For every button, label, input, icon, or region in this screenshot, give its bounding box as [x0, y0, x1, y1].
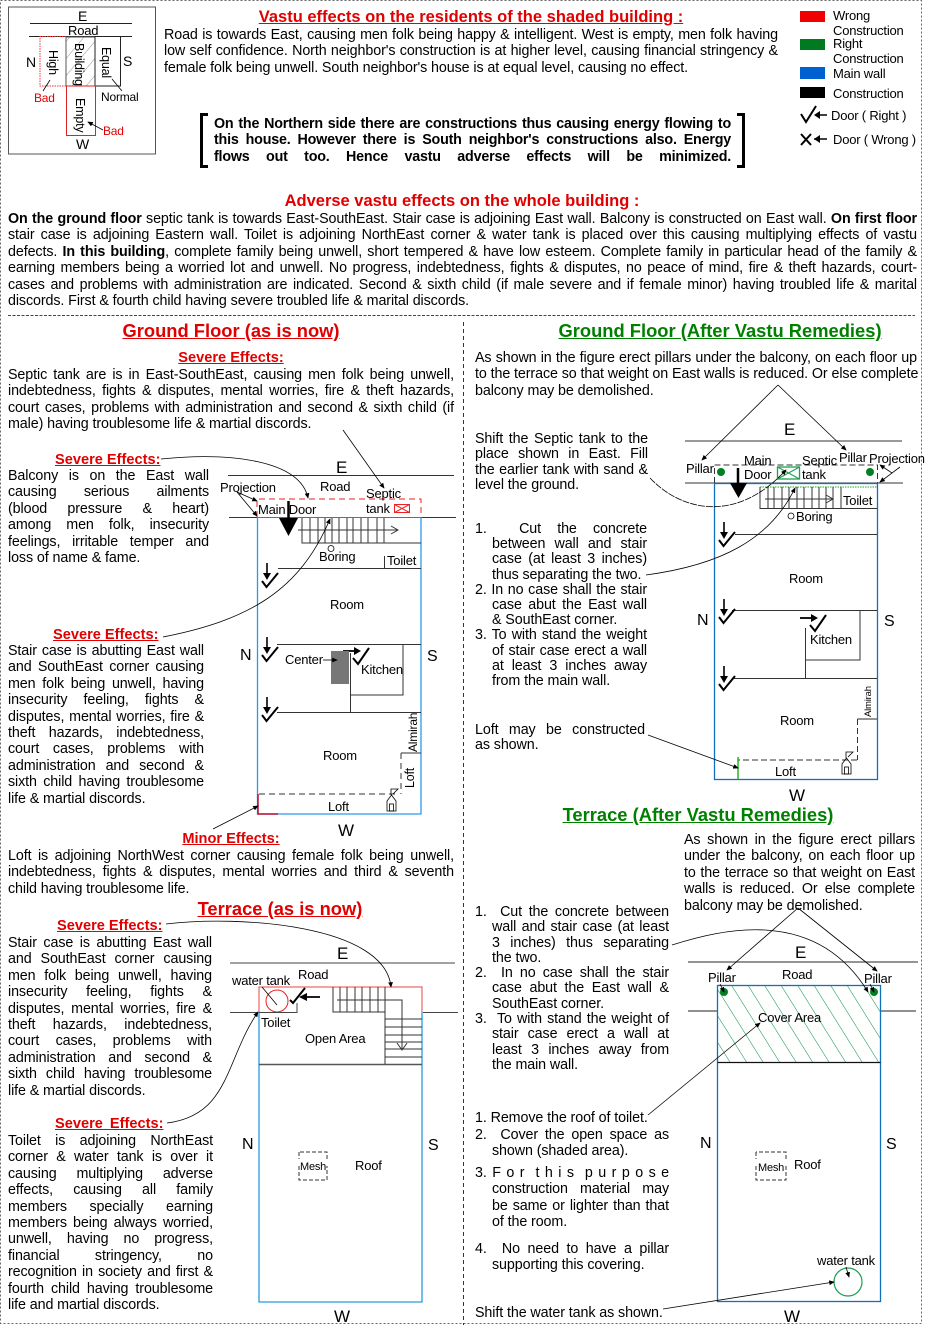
diagram: plot sketch: Bad	[34, 91, 55, 105]
plan: terrace after remedies: N	[700, 1135, 711, 1152]
text: septic tank effects: indebtedness, fights & disputes, mental worries, fire & theft hazards,	[8, 383, 454, 399]
diagram: plot sketch: Bad	[103, 124, 124, 138]
text: balcony effects: among men folk, insecurity	[8, 517, 209, 533]
text: whole building: On the ground floor septic tank is towards East-SouthEast. Stair case is adjoining East wall. Balcony is constructed on East wall. On first floor	[8, 211, 917, 227]
text: balcony effects	[8, 468, 210, 566]
text: ground floor remedies list: between wall and stair	[492, 536, 647, 552]
plan: ground floor as is: Boring	[319, 549, 355, 564]
text: balcony effects: loss of name & fame.	[8, 550, 140, 566]
text: shift septic tank	[475, 431, 648, 493]
diagram: plot sketch: Road	[68, 23, 98, 38]
text: construction material: 3. F o r t h i s p u r p o s e	[475, 1165, 669, 1181]
bracketed note: flows out too. Hence vastu adverse effects will be minimized.	[214, 149, 731, 165]
plan: ground floor as is: N	[240, 647, 251, 664]
text: shift septic tank: Shift the Septic tank to the	[475, 431, 648, 447]
text: shift septic tank: place shown in East. Fill	[475, 446, 648, 462]
text: shift septic tank: the earlier tank with sand &	[475, 462, 648, 478]
plan: ground floor after remedies: Toilet	[843, 493, 873, 508]
text: stair case effects: insecurity feeling, fights &	[8, 692, 204, 708]
text: loft effects	[8, 848, 454, 897]
text: terrace stair effects: insecurity feeling, fights &	[8, 984, 212, 1000]
text: toilet effects: fourth child having troublesome	[8, 1281, 213, 1297]
text: ground floor remedies list: of stair case erect a wall	[492, 643, 647, 659]
plan: ground floor after remedies: Room	[780, 713, 814, 728]
plan: ground floor as is: Loft	[328, 799, 349, 814]
text: toilet effects: life and martial discords.	[8, 1297, 160, 1313]
text: cover open space: shown (shaded area).	[492, 1143, 628, 1159]
plan: terrace after remedies: Cover Area	[758, 1010, 822, 1025]
plan: ground floor after remedies: Loft	[775, 764, 796, 779]
legend: Wrong	[833, 8, 870, 23]
plan: terrace as is: Roof	[355, 1158, 382, 1173]
text: toilet effects: causing multiplying adverse	[8, 1166, 213, 1182]
text: cover open space: 2. Cover the open space as	[475, 1127, 669, 1143]
text: terrace remedies list: the main wall.	[492, 1057, 578, 1073]
text: terrace remedies list: 2. In no case shall the stair	[475, 965, 669, 981]
text: stair case effects: administration and second &	[8, 758, 204, 774]
text: balcony effects: Balcony is on the East wall	[8, 468, 209, 484]
plan: ground floor after remedies: E	[784, 420, 795, 439]
text: no pillar: supporting this covering.	[492, 1257, 644, 1273]
diagram: plot sketch: Empty	[73, 98, 87, 133]
text: terrace remedies list: wall and stair case (at least	[492, 919, 669, 935]
arrows: terrace as is	[166, 921, 391, 1123]
text: terrace pillars advice: under the balcony, on each floor up	[684, 848, 915, 864]
text: toilet effects: members specially earning	[8, 1199, 213, 1215]
plan: terrace as is: S	[428, 1137, 438, 1154]
plan: terrace as is: Open Area	[305, 1031, 366, 1046]
text: terrace remedies list: 3. To with stand the weight of	[475, 1011, 669, 1027]
text: loft effects: Loft is adjoining NorthWest corner causing female folk being unwell,	[8, 848, 454, 864]
diagram: plot sketch: S	[123, 53, 132, 69]
text: residents effects	[164, 27, 778, 76]
text: terrace remedies list: case abut the East wall &	[492, 980, 669, 996]
text: terrace stair effects: life & martial discords.	[8, 1083, 145, 1099]
text: no pillar	[475, 1241, 669, 1273]
text: septic tank effects: court cases, problems with administration and second & sixth child (if	[8, 400, 454, 416]
text: ground floor remedies list: case (at least 3 inches)	[492, 551, 647, 567]
plan: ground floor after remedies: Boring	[796, 509, 832, 524]
plan: ground floor after remedies: Pillar	[686, 461, 715, 476]
plan: ground floor as is: Center	[285, 652, 324, 667]
plan: terrace after remedies: Pillar	[864, 971, 893, 986]
plan: terrace after remedies: Roof	[794, 1157, 821, 1172]
plan: ground floor after remedies: W	[789, 786, 805, 805]
plan: ground floor after remedies: Projection	[869, 451, 925, 466]
plan: ground floor as is: Road	[320, 479, 350, 494]
text: stair case effects: and SouthEast corner causing	[8, 659, 204, 675]
plan: terrace as is: N	[242, 1136, 253, 1153]
plan: ground floor after remedies: Septic	[802, 453, 838, 468]
text: septic tank effects	[8, 367, 454, 432]
plan: terrace as is: Toilet	[261, 1015, 291, 1030]
heading: severe effects 5: Severe Effects:	[55, 1116, 163, 1132]
text: cover open space	[475, 1127, 669, 1159]
heading: severe effects 3: Severe Effects:	[53, 627, 158, 643]
text: whole building: earning members being a worried lot and unwell. No progress, indebtedness, fights & disputes, no peace of mind, fire & theft hazards, court-	[8, 260, 917, 276]
text: ground floor remedies list: 3. To with stand the weight	[475, 627, 647, 643]
plan: terrace after remedies: Mesh	[758, 1162, 784, 1174]
plan: ground floor after remedies: Pillar	[839, 450, 868, 465]
text: toilet effects: financial stringency, no	[8, 1248, 213, 1264]
arrows: terrace after remedies	[648, 908, 877, 1309]
text: shift septic tank: level the ground.	[475, 477, 579, 493]
text: terrace stair effects: and SouthEast corner causing	[8, 951, 212, 967]
text: toilet effects: Toilet is adjoining NorthEast	[8, 1133, 213, 1149]
plan: terrace after remedies: S	[886, 1136, 896, 1153]
text: stair case effects: sixth child having troublesome	[8, 774, 204, 790]
text: loft effects: child having troublesome life.	[8, 881, 189, 897]
heading: terrace after remedies: Terrace (After Vastu Remedies)	[563, 804, 833, 825]
text: construction material: of the room.	[492, 1214, 567, 1230]
text: loft note: as shown.	[475, 737, 538, 753]
text: terrace stair effects: sixth child having troublesome	[8, 1066, 212, 1082]
plan: ground floor after remedies: Door	[744, 467, 772, 482]
plan: terrace as is: E	[337, 944, 348, 963]
legend: Right	[833, 36, 863, 51]
text: shift water tank: Shift the water tank as shown.	[475, 1305, 663, 1321]
plan: ground floor as is: Toilet	[387, 553, 417, 568]
plan: ground floor as is: Room	[330, 597, 364, 612]
text: remove roof: 1. Remove the roof of toilet.	[475, 1110, 648, 1126]
plan: ground floor after remedies	[685, 420, 925, 805]
text: toilet effects: corner & water tank is over it	[8, 1149, 213, 1165]
bracketed note: this house. However there is South neighbor's constructions also. Energy	[214, 132, 731, 148]
plan: ground floor after remedies: Room	[789, 571, 823, 586]
text: stair case effects: life & martial discords.	[8, 791, 145, 807]
text: pillars advice: balcony may be demolished.	[475, 383, 654, 399]
text: terrace stair effects: theft hazards, indebtedness,	[8, 1017, 212, 1033]
text: terrace pillars advice: balcony may be demolished.	[684, 898, 863, 914]
plan: ground floor after remedies: tank	[802, 467, 826, 482]
text: whole building	[8, 211, 917, 309]
text: pillars advice: As shown in the figure erect pillars under the balcony, on each floor up	[475, 350, 917, 366]
plan: terrace as is: water tank	[231, 973, 291, 988]
text: terrace remedies list: 1. Cut the concrete between	[475, 904, 669, 920]
text: ground floor remedies list: from the main wall.	[492, 673, 610, 689]
plan: ground floor as is: Almirah	[406, 713, 420, 752]
text: construction material	[475, 1165, 670, 1230]
plan: ground floor after remedies: Almirah	[863, 686, 874, 717]
text: terrace remedies list: least 3 inches away from	[492, 1042, 669, 1058]
diagram: plot sketch: N	[26, 54, 36, 70]
arrows: ground floor as is	[161, 430, 384, 829]
text: whole building: stair case is adjoining Eastern wall. Toilet is adjoining NorthEast corner & water tank is placed over this causing multiplying effects of vastu	[8, 227, 917, 243]
text: terrace pillars advice: to the terrace so that weight on East	[684, 865, 915, 881]
text: terrace stair effects	[8, 935, 212, 1099]
text: no pillar: 4. No need to have a pillar	[475, 1241, 669, 1257]
plan: terrace as is: Road	[298, 967, 328, 982]
text: toilet effects: members being always worried,	[8, 1215, 213, 1231]
text: stair case effects: theft hazards, indebtedness,	[8, 725, 204, 741]
text: ground floor remedies list: thus separating the two.	[492, 567, 641, 583]
text: ground floor remedies list: 2. In no case shall the stair	[475, 582, 647, 598]
legend: Door ( Wrong )	[833, 132, 916, 147]
diagram: plot sketch: Equal	[99, 47, 113, 78]
text: terrace stair effects: men folk being unwell, having	[8, 968, 212, 984]
text: whole building: defects. In this building, complete family being unwell, short tempered & have low esteem. Complete family in particular head of the family &	[8, 244, 917, 260]
text: terrace remedies list: stair case erect a wall at	[492, 1026, 669, 1042]
diagram: plot sketch: W	[76, 136, 90, 152]
plan: terrace after remedies	[688, 943, 918, 1325]
heading: ground floor after remedies: Ground Floor (After Vastu Remedies)	[558, 320, 882, 341]
text: terrace remedies list: 3 inches) thus separating	[492, 935, 669, 951]
plan: ground floor as is: Loft	[403, 767, 417, 788]
plan: ground floor as is: tank	[366, 501, 390, 516]
plan: ground floor as is: Main Door	[258, 502, 317, 517]
bracketed note: On the Northern side there are constructions thus causing energy flowing to	[214, 116, 731, 132]
diagram: plot sketch: Normal	[101, 90, 138, 104]
text: balcony effects: causing serious ailments	[8, 484, 209, 500]
plan: terrace after remedies: E	[795, 943, 806, 962]
plan: terrace after remedies: water tank	[816, 1253, 876, 1268]
plan: ground floor as is: Septic	[366, 486, 402, 501]
text: terrace remedies list: the two.	[492, 950, 541, 966]
text: residents effects: low self confidence. North neighbor's construction is at higher level, causing financial stringency &	[164, 43, 778, 59]
legend: Construction	[833, 51, 904, 66]
plan: ground floor as is: Kitchen	[361, 662, 403, 677]
diagram: plot sketch: Building	[72, 43, 86, 86]
legend: Door ( Right )	[831, 108, 906, 123]
text: ground floor remedies list: at least 3 inches away	[492, 658, 647, 674]
text: stair case effects: men folk being unwell, having	[8, 676, 204, 692]
plan: ground floor as is: S	[427, 648, 437, 665]
text: toilet effects: unwell, having no progress,	[8, 1231, 213, 1247]
legend: Main wall	[833, 66, 886, 81]
text: stair case effects	[8, 643, 204, 807]
heading: terrace as is: Terrace (as is now)	[198, 898, 362, 919]
title: whole building: Adverse vastu effects on the whole building :	[285, 192, 639, 210]
text: loft note: Loft may be constructed	[475, 722, 645, 738]
text: stair case effects: disputes, mental worries, fire &	[8, 709, 204, 725]
plan: ground floor as is: Projection	[220, 480, 276, 495]
text: ground floor remedies list: & SouthEast corner.	[492, 612, 617, 628]
heading: ground floor as is: Ground Floor (as is now)	[122, 320, 340, 341]
text: residents effects: female folk being unwell. South neighbor's house is at equal level, causing no effect.	[164, 60, 688, 76]
text: construction material: be same or lighter than that	[492, 1198, 669, 1214]
text: balcony effects: feelings, irritable temper and	[8, 534, 209, 550]
text: terrace stair effects: administration and second &	[8, 1050, 212, 1066]
text: terrace stair effects: Stair case is abutting East wall	[8, 935, 212, 951]
text: terrace pillars advice: As shown in the figure erect pillars	[684, 832, 915, 848]
text: septic tank effects: male) having troublesome life & martial discords.	[8, 416, 311, 432]
plan: ground floor as is	[220, 458, 456, 840]
plan: terrace after remedies: Road	[782, 967, 812, 982]
text: whole building: discords. First & fourth child having severe troubled life & marital discords.	[8, 293, 469, 309]
arrows: ground floor after remedies	[646, 385, 900, 768]
text: balcony effects: (blood pressure & heart)	[8, 501, 209, 517]
plan: ground floor after remedies: S	[884, 613, 894, 630]
text: toilet effects	[8, 1133, 214, 1313]
plan: terrace after remedies: Pillar	[708, 970, 737, 985]
text: loft effects: indebtedness, fights & disputes, mental worries and third & seventh	[8, 864, 454, 880]
plan: ground floor as is: Room	[323, 748, 357, 763]
text: terrace pillars advice	[684, 832, 915, 914]
diagram: plot sketch: High	[46, 50, 60, 75]
text: terrace remedies list: SouthEast corner.	[492, 996, 604, 1012]
plan: ground floor after remedies: Main	[744, 453, 771, 468]
heading: severe effects 1: Severe Effects:	[178, 350, 284, 366]
diagram: plot sketch: E	[78, 8, 87, 24]
text: stair case effects: court cases, problems with	[8, 741, 204, 757]
plan: terrace as is: Mesh	[300, 1161, 326, 1173]
text: septic tank effects: Septic tank are is in East-SouthEast, causing men folk being unwell,	[8, 367, 454, 383]
bracketed note	[200, 113, 745, 168]
text: pillars advice	[475, 350, 918, 399]
heading: minor effects: Minor Effects:	[182, 831, 280, 847]
text: toilet effects: recognition in society and first &	[8, 1264, 213, 1280]
text: terrace remedies list	[475, 904, 670, 1073]
heading: severe effects 2: Severe Effects:	[55, 452, 160, 468]
text: stair case effects: Stair case is abutting East wall	[8, 643, 204, 659]
text: ground floor remedies list	[475, 521, 648, 689]
text: residents effects: Road is towards East, causing men folk being happy & intelligent. West is empty, men folk having	[164, 27, 778, 43]
text: terrace pillars advice: walls is reduced. Or else complete	[684, 881, 915, 897]
plan: ground floor as is: W	[338, 821, 354, 840]
plan: ground floor after remedies: Kitchen	[810, 632, 852, 647]
text: toilet effects: effects, causing all family	[8, 1182, 213, 1198]
plan: ground floor as is: E	[336, 458, 347, 477]
text: construction material: construction material may	[492, 1181, 669, 1197]
legend: Construction	[833, 86, 904, 101]
text: ground floor remedies list: 1. Cut the concrete	[475, 521, 647, 537]
plan: terrace as is	[230, 944, 458, 1325]
title: residents: Vastu effects on the residents of the shaded building :	[259, 8, 683, 26]
legend: Construction	[833, 23, 904, 38]
text: ground floor remedies list: case abut the East wall	[492, 597, 647, 613]
text: terrace stair effects: disputes, mental worries, fire &	[8, 1001, 212, 1017]
text: pillars advice: to the terrace so that weight on East walls is reduced. Or else complete	[475, 366, 918, 382]
heading: severe effects 4: Severe Effects:	[57, 918, 162, 934]
plan: ground floor after remedies: N	[697, 612, 708, 629]
text: whole building: cases and problems with administration are indicated. Second & sixth child (if male severe and if female minor) having troubled life & marital	[8, 277, 917, 293]
text: loft note	[475, 722, 645, 753]
text: terrace stair effects: court cases, problems with	[8, 1033, 212, 1049]
